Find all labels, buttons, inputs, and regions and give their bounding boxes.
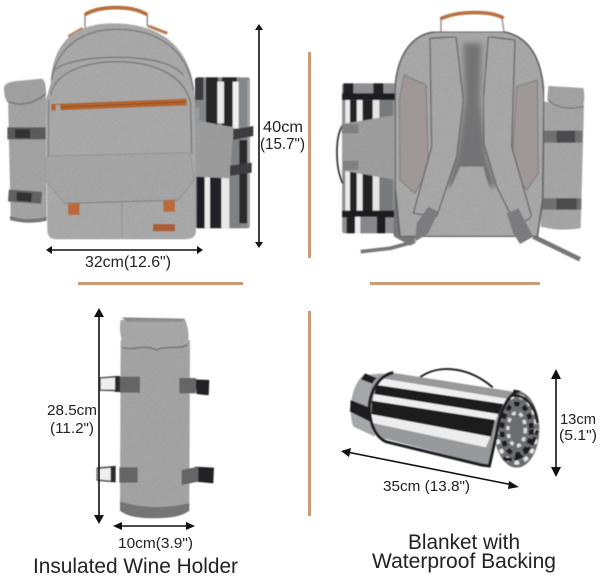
binding strap outline — [369, 373, 517, 466]
striped blanket on left side — [342, 83, 397, 233]
left roll stripes — [350, 373, 383, 422]
front flap — [45, 153, 194, 238]
bottom harness straps — [361, 187, 580, 259]
backpack front view — [4, 8, 253, 239]
caption: blanket: Blanket with — [408, 530, 520, 554]
dimension: 35cm length: 35cm (13.8") — [383, 479, 470, 495]
striped blanket on right side — [195, 77, 252, 230]
leather tabs and label — [68, 200, 175, 231]
collar opening — [122, 317, 185, 322]
central channel shadow — [447, 43, 497, 187]
wine holder on right side — [541, 86, 584, 230]
dimension: 13cm height — [551, 369, 597, 477]
right shoulder strap — [483, 37, 533, 244]
wine holder detail — [97, 317, 214, 518]
caption: blanket — [372, 530, 556, 573]
blanket carry strap — [337, 125, 343, 183]
rolled collar — [120, 319, 189, 349]
metal and leather top handle — [68, 8, 167, 37]
dimension: 28.5cm height: (11.2") — [50, 420, 94, 437]
dimension: 40cm height: 40cm — [263, 119, 303, 136]
zippers — [48, 29, 193, 157]
caption: blanket: Waterproof Backing — [372, 549, 556, 573]
side pocket strap — [195, 120, 253, 178]
lumbar panel — [432, 167, 502, 233]
dimension: 10cm width — [113, 522, 195, 552]
webbing straps — [119, 377, 198, 485]
buckle right top — [195, 379, 209, 395]
main roll body — [370, 372, 514, 464]
dimension: 32cm width: 32cm(12.6") — [85, 254, 171, 271]
buckle right bottom — [195, 467, 214, 483]
dimension: 40cm height: (15.7") — [260, 136, 305, 153]
dimension: 40cm height — [255, 24, 305, 248]
dimension: 13cm height: 13cm — [560, 411, 596, 428]
orange divider lines — [78, 52, 540, 516]
mesh pads — [399, 75, 538, 193]
main body — [46, 23, 196, 239]
spiral stripes — [497, 396, 537, 463]
buckle left top — [100, 376, 120, 392]
buckle left bottom — [97, 467, 115, 482]
dimension: 28.5cm height: 28.5cm — [47, 402, 97, 419]
wine holder on left side — [4, 79, 47, 223]
left shoulder strap — [413, 37, 463, 242]
dimension: 28.5cm height — [47, 308, 104, 524]
dimension: 13cm height: (5.1") — [559, 427, 597, 444]
back body panel — [395, 32, 544, 237]
rolled blanket detail — [350, 367, 539, 473]
backpack back view — [337, 13, 584, 259]
carry handle — [420, 369, 493, 387]
left roll end — [351, 373, 383, 437]
insulated body — [120, 340, 190, 509]
dimension: 32cm width — [46, 246, 203, 271]
dimension: 35cm length — [341, 448, 519, 495]
collar drawstring — [123, 345, 187, 350]
orange front zipper — [51, 99, 199, 119]
blanket roll end — [494, 391, 539, 468]
bottom band — [120, 502, 189, 518]
metal and leather top handle — [441, 13, 504, 32]
dimension: 10cm width: 10cm(3.9") — [118, 536, 193, 552]
side pocket flap — [342, 115, 397, 180]
